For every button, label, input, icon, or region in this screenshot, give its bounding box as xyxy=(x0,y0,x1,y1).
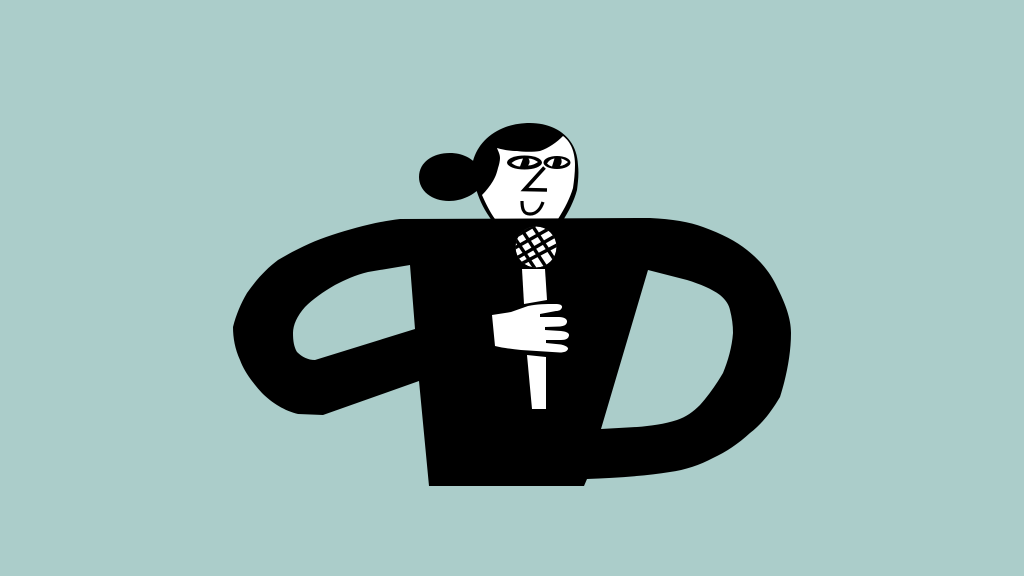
head xyxy=(473,123,578,222)
microphone xyxy=(516,226,556,409)
hand xyxy=(492,304,569,352)
head outline and hair xyxy=(473,123,578,222)
nose xyxy=(524,168,547,190)
smile xyxy=(522,201,543,214)
microphone handle lower xyxy=(527,355,546,409)
face xyxy=(482,136,575,219)
body and arms xyxy=(233,218,791,486)
illustration: person holding a microphone xyxy=(233,123,791,486)
microphone handle upper xyxy=(522,269,547,304)
hair bun xyxy=(419,153,482,201)
left eye xyxy=(507,156,542,170)
right eye xyxy=(544,156,570,169)
microphone head mesh xyxy=(516,226,556,268)
